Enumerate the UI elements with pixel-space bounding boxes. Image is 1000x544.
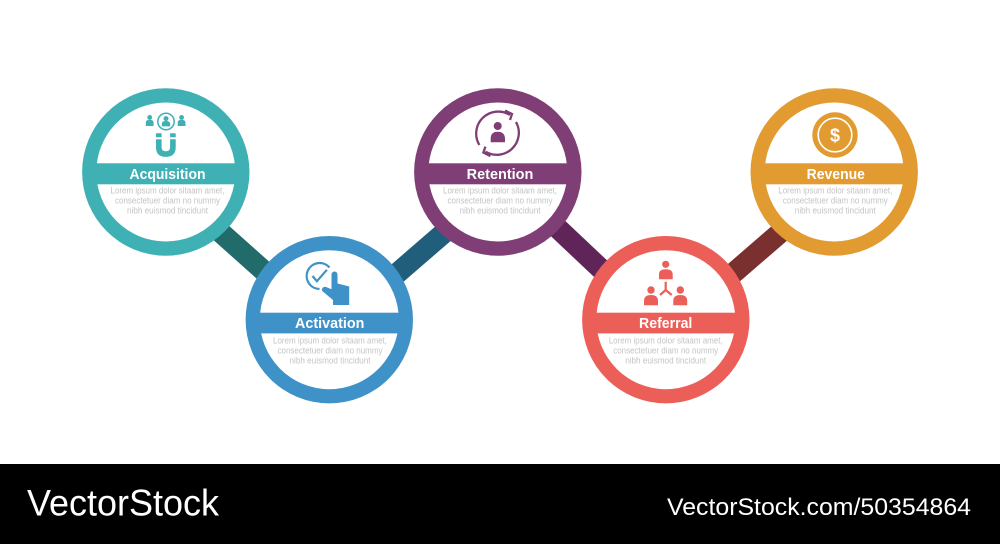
text: acquisition description: consectetuer diam no nummy (115, 195, 220, 205)
text: activation description: Lorem ipsum dolor sitaam amet, (273, 335, 387, 345)
connector: activation to retention (380, 219, 460, 288)
text: activation description: nibh euismod tincidunt (290, 355, 371, 365)
panel: acquisition (82, 88, 250, 256)
text: acquisition description: nibh euismod tincidunt (127, 205, 208, 215)
icon: dollar coin (812, 112, 858, 158)
footer bar (0, 464, 1000, 544)
text: revenue description (778, 185, 892, 215)
text: revenue description: nibh euismod tincidunt (795, 205, 876, 215)
text: referral description (609, 335, 723, 365)
text: referral description: consectetuer diam no nummy (613, 345, 719, 355)
text: retention description: Lorem ipsum dolor sitaam amet, (443, 185, 557, 195)
icon: people and magnet (146, 113, 185, 157)
connector: acquisition to activation (205, 218, 280, 285)
title: acquisition: Acquisition (130, 167, 206, 183)
text: activation description: consectetuer diam no nummy (278, 345, 383, 355)
text: referral description: Lorem ipsum dolor sitaam amet, (609, 335, 723, 345)
footer logo text: VectorStock (27, 482, 219, 524)
icon: check and pointing hand (307, 263, 349, 305)
text: activation description (273, 335, 387, 365)
icon: referral network of people (644, 261, 687, 305)
icon: person in cycle arrows (476, 110, 519, 156)
text: revenue description: consectetuer diam no nummy (783, 195, 888, 205)
text: retention description (443, 185, 557, 215)
footer url text: VectorStock.com/50354864 (667, 494, 971, 521)
connector: referral to revenue (716, 219, 796, 288)
text: retention description: nibh euismod tincidunt (460, 205, 541, 215)
title: retention: Retention (467, 167, 533, 183)
connector: retention to referral (540, 212, 620, 287)
text: retention description: consectetuer diam no nummy (448, 195, 553, 205)
panel: revenue (750, 88, 918, 256)
text: revenue description: Lorem ipsum dolor sitaam amet, (778, 185, 892, 195)
title: activation: Activation (295, 316, 364, 332)
text: referral description: nibh euismod tincidunt (625, 355, 707, 365)
icon: dollar coin: $ (830, 126, 840, 146)
title: revenue: Revenue (807, 167, 865, 183)
text: acquisition description: Lorem ipsum dolor sitaam amet, (110, 185, 224, 195)
panel: retention (414, 88, 582, 256)
text: acquisition description (110, 185, 224, 215)
title: referral: Referral (639, 316, 692, 332)
panel: referral (582, 236, 750, 403)
panel: activation (246, 236, 413, 403)
